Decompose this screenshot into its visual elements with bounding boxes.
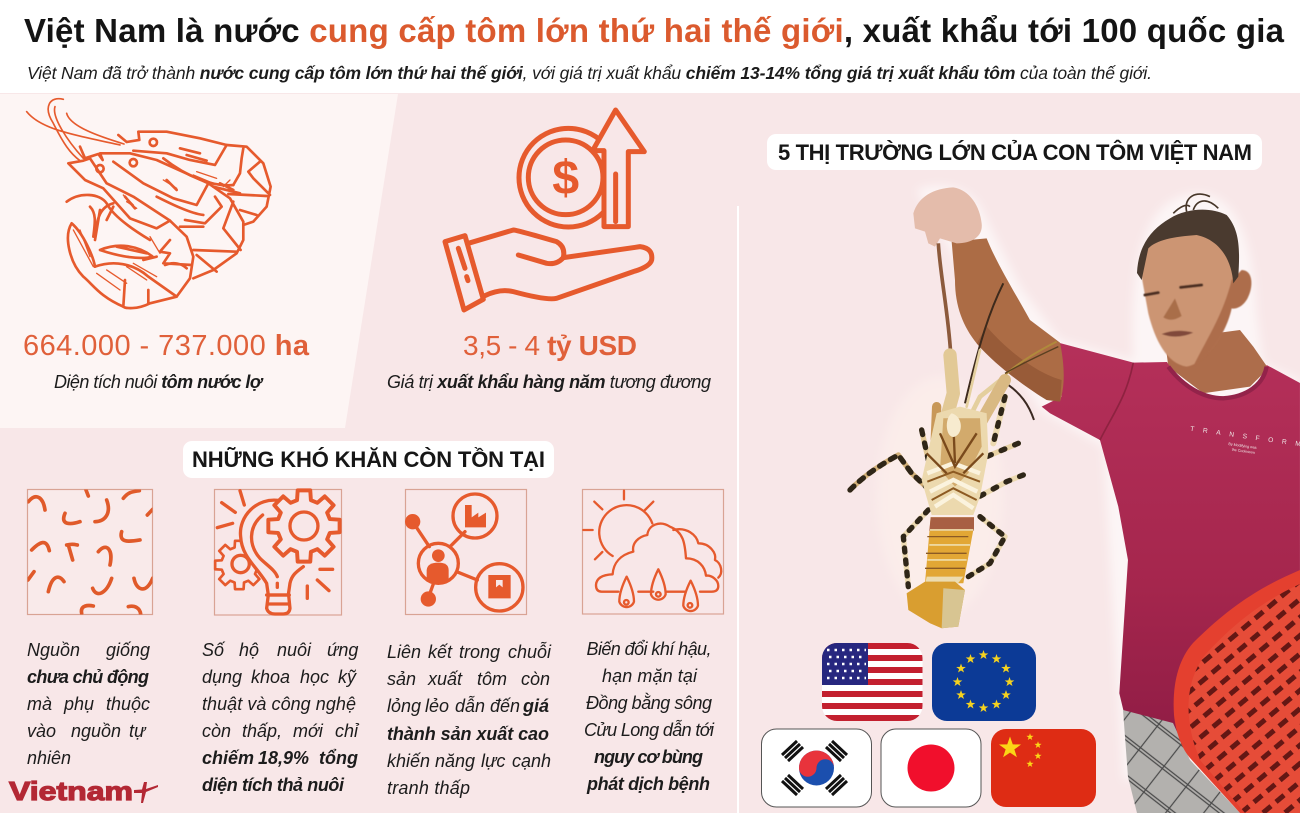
panel: left light stat background xyxy=(0,94,398,428)
text: difficulty 1: giống xyxy=(106,640,150,660)
text: difficulty 2 xyxy=(202,640,360,795)
basket xyxy=(1174,570,1300,813)
icon: hand with coin and arrow: $ xyxy=(552,151,579,205)
text: difficulty 3: khiến xyxy=(387,751,430,771)
heading: five markets: 5 THỊ TRƯỜNG LỚN CỦA CON TÔM VIỆT NAM xyxy=(778,140,1252,165)
text: difficulty 3: Liên xyxy=(387,642,421,662)
lobster tail xyxy=(925,517,974,583)
text: difficulty 3: dẫn xyxy=(455,696,485,716)
flag: China xyxy=(991,729,1096,807)
arm xyxy=(952,238,1064,402)
flag: South Korea xyxy=(762,729,872,807)
text: difficulty 1: mà xyxy=(27,694,52,714)
man xyxy=(913,187,1300,747)
text: difficulty 2: dụng xyxy=(202,667,242,687)
text: difficulty 1: tự xyxy=(129,721,147,741)
logo: Vietnam+ xyxy=(9,776,158,806)
text: difficulty 3: tranh thấp xyxy=(387,778,470,798)
text: difficulty 2: chiếm xyxy=(202,748,254,768)
shirt print: the Coolesson xyxy=(1231,448,1255,455)
text: difficulty 4: nguy cơ bùng xyxy=(594,747,703,767)
text: difficulty 3: lỏng xyxy=(387,696,421,716)
heading: difficulties xyxy=(183,441,554,478)
text: difficulty 3: chuỗi xyxy=(508,642,552,662)
text: difficulty 3: đến xyxy=(490,696,520,716)
lobster legs xyxy=(850,350,1023,587)
hair xyxy=(1137,210,1239,283)
text: difficulty 3: giá xyxy=(522,696,549,716)
text: difficulty 2: khoa xyxy=(251,667,290,687)
text: difficulty 3: còn xyxy=(521,669,550,689)
text: difficulty 2: tổng xyxy=(319,748,358,768)
text: difficulty 2: chỉ xyxy=(335,721,360,741)
text: difficulty 1: Nguồn xyxy=(27,640,80,660)
icon: shrimp xyxy=(27,99,271,308)
stat: shrimp area value: 664.000 - 737.000 ha xyxy=(23,330,310,362)
icon: supply chain network xyxy=(405,490,526,614)
photo glow xyxy=(877,186,1300,780)
icon: lightbulb with gears xyxy=(214,490,342,615)
hand xyxy=(913,187,982,247)
lobster xyxy=(850,243,1058,628)
text: difficulty 2: kỹ xyxy=(338,667,357,687)
text: difficulty 3: năng xyxy=(435,751,475,771)
stat: shrimp area label: Diện tích nuôi tôm nước lợ xyxy=(54,372,264,392)
neck xyxy=(1165,330,1268,393)
divider line xyxy=(737,206,739,813)
shirt print: TRANSFORM xyxy=(1190,426,1300,448)
text: difficulty 1: nguồn xyxy=(71,721,121,741)
text: difficulty 1: phụ xyxy=(63,694,94,714)
text: difficulty 2: thuật và công nghệ xyxy=(202,694,356,714)
subtitle: Việt Nam đã trở thành nước cung cấp tôm lớn thứ hai thế giới, với giá trị xuất khẩu chiếm 13-14% tổng giá trị xuất khẩu tôm của toàn thế giới. xyxy=(27,63,1152,83)
text: difficulty 3: xuất xyxy=(427,669,463,689)
text: difficulty 3: sản xyxy=(387,669,416,689)
text: difficulty 2: Số xyxy=(202,640,226,660)
photo: fisherman holding lobster xyxy=(850,186,1300,813)
icon: climate change xyxy=(582,490,724,614)
stat: export value: 3,5 - 4 tỷ USD xyxy=(463,330,637,361)
heading: difficulties: NHỮNG KHÓ KHĂN CÒN TỒN TẠI xyxy=(192,447,545,472)
text: difficulty 3: thành sản xuất cao xyxy=(387,724,549,744)
text: difficulty 2: thấp, xyxy=(242,721,282,741)
flag: Japan xyxy=(881,729,981,807)
shorts xyxy=(1123,710,1240,813)
text: difficulty 1: thuộc xyxy=(106,694,150,714)
text: difficulty 1: nhiên xyxy=(27,748,71,768)
text: difficulty 3: trong xyxy=(459,642,500,662)
text: difficulty 2: còn xyxy=(202,721,231,741)
text: difficulty 3: kết xyxy=(428,642,453,662)
head xyxy=(1142,222,1251,367)
text: difficulty 1: chưa chủ động xyxy=(27,667,149,687)
text: difficulty 2: 18,9% xyxy=(258,748,309,768)
text: difficulty 2: hộ xyxy=(239,640,259,660)
text: difficulty 2: diện tích thả nuôi xyxy=(202,775,345,795)
lobster carapace xyxy=(922,407,988,515)
text: difficulty 1 xyxy=(27,640,150,768)
title: Việt Nam là nước cung cấp tôm lớn thứ hai thế giới, xuất khẩu tới 100 quốc gia xyxy=(24,12,1285,49)
text: difficulty 1: vào xyxy=(27,721,56,741)
text: difficulty 3: cạnh xyxy=(512,751,551,771)
text: difficulty 4: phát dịch bệnh xyxy=(586,774,710,794)
t-shirt xyxy=(1042,343,1300,747)
icon: shrimp seed pattern xyxy=(28,490,153,614)
text: difficulty 3 xyxy=(387,642,552,798)
text: difficulty 2: mới xyxy=(293,721,324,741)
text: difficulty 4: Cửu Long dẫn tới xyxy=(584,720,715,740)
heading: five markets xyxy=(767,134,1262,170)
shirt print: By Modifying was xyxy=(1228,442,1257,450)
text: difficulty 2: nuôi xyxy=(277,640,312,660)
text: difficulty 3: lực xyxy=(481,751,505,771)
lobster antennae xyxy=(938,243,951,353)
text: difficulty 4: Đồng bằng sông xyxy=(586,693,712,713)
flag: EU xyxy=(932,643,1036,721)
text: difficulty 2: học xyxy=(300,667,329,687)
text: difficulty 3: tôm xyxy=(477,669,507,689)
text: difficulty 4: hạn mặn tại xyxy=(602,666,698,686)
icon: hand with coin and arrow xyxy=(445,110,652,310)
text: difficulty 2: ứng xyxy=(327,640,358,660)
flag: USA xyxy=(822,643,923,721)
text: difficulty 4: Biến đổi khí hậu, xyxy=(586,639,712,659)
text: difficulty 3: lẻo xyxy=(425,696,449,716)
text: difficulty 4 xyxy=(584,639,715,794)
stat: export label: Giá trị xuất khẩu hàng năm tương đương xyxy=(387,372,711,392)
logo: Vietnam+: Vietnam xyxy=(9,776,133,806)
header band xyxy=(0,0,1300,93)
